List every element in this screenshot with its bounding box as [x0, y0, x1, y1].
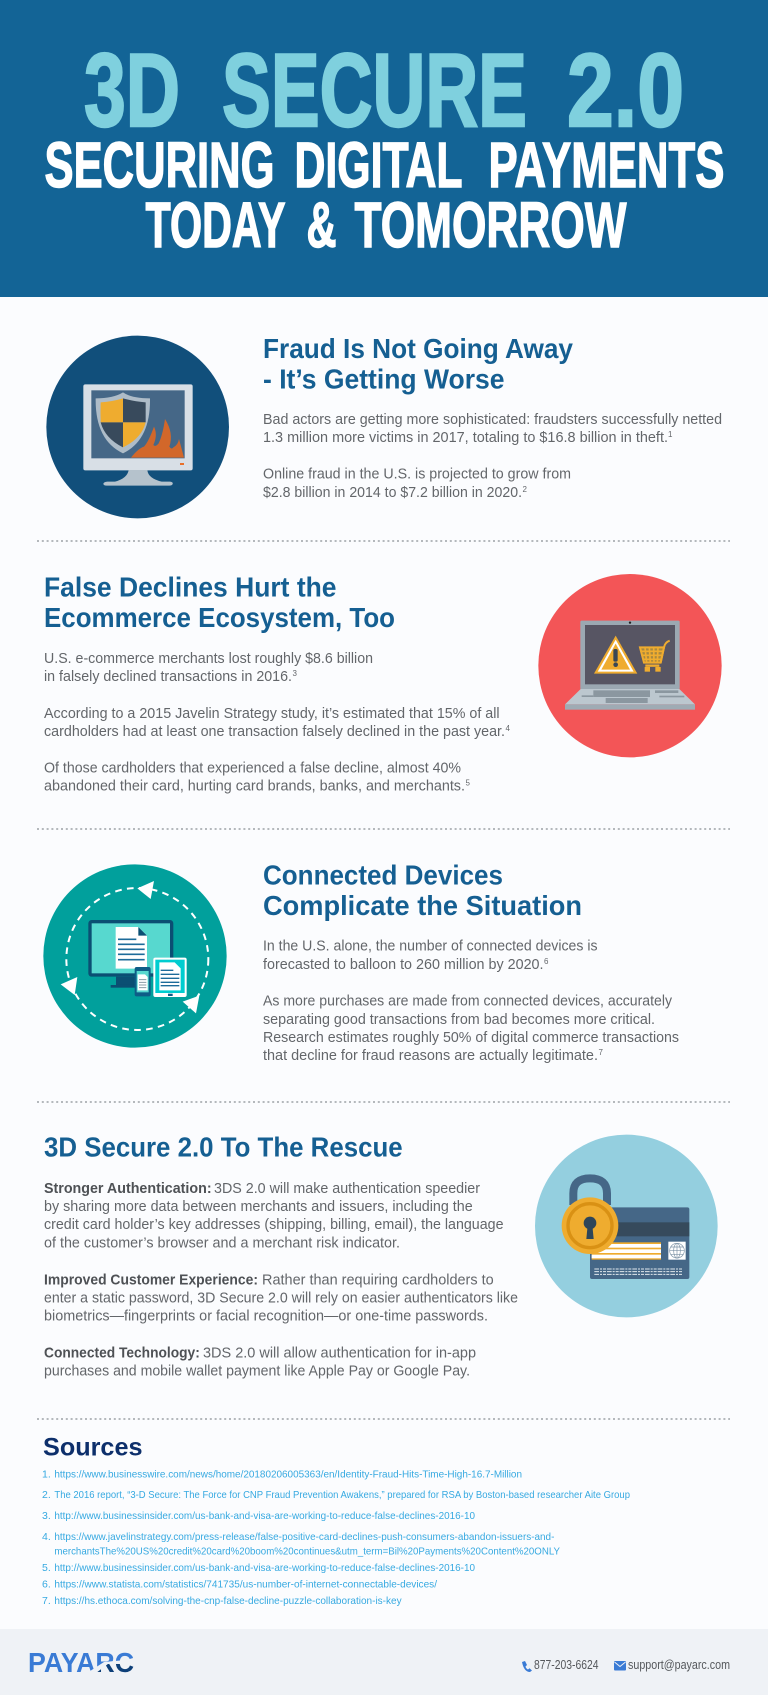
text block: improved customer experience: Improved Customer Experience: — [44, 1271, 258, 1288]
text block: stronger authentication: of the customer’s browser and a merchant risk indicator. — [44, 1234, 400, 1251]
text block: fraud body: 2 — [522, 485, 528, 494]
list: source links: https://www.javelinstrategy.com/press-release/false-positive-card-declines-push-consumers-abandon-issuers-and- — [54, 1531, 555, 1543]
text block: fraud body: Online fraud in the U.S. is projected to grow from — [263, 466, 571, 483]
list: source links: 6. — [42, 1579, 51, 1591]
text block: improved customer experience — [44, 1271, 518, 1325]
text block: connected devices body: As more purchases are made from connected devices, accurately — [263, 993, 672, 1010]
list: source links: 5. — [42, 1562, 51, 1574]
panel: false declines — [44, 571, 722, 795]
contact: phone: 877-203-6624 — [534, 1658, 599, 1672]
logo: PAYARC: PAYARC — [28, 1647, 134, 1678]
text block: false declines body: Of those cardholders that experienced a false decline, almost 40% — [44, 760, 461, 776]
footer — [0, 1629, 768, 1695]
icon: monitor with shield and flames — [46, 336, 229, 518]
text block: connected devices body — [263, 938, 679, 1064]
heading: connected devices: Complicate the Situation — [263, 890, 582, 921]
list: source links: https://www.businesswire.com/news/home/20180206005363/en/Identity-Fraud-Hits-Time-High-16.7-Million — [54, 1468, 522, 1480]
text block: connected devices body: that decline for fraud reasons are actually legitimate. — [263, 1047, 598, 1064]
list: source links: http://www.businessinsider.com/us-bank-and-visa-are-working-to-reduce-false-declines-2016-10 — [54, 1562, 475, 1574]
list: source links: https://www.statista.com/statistics/741735/us-number-of-internet-connectable-devices/ — [54, 1579, 437, 1591]
title: 3D Secure 2.0: 2.0 — [567, 33, 684, 149]
header banner — [0, 0, 768, 297]
list: source links: 3. — [42, 1510, 51, 1522]
icon: laptop with warning and cart — [538, 574, 722, 757]
subtitle: today and tomorrow — [146, 189, 627, 261]
icon: connected devices with arrows — [43, 864, 227, 1048]
title: 3D Secure 2.0: SECURE — [222, 33, 527, 149]
logo: PAYARC: PAYARC — [28, 1647, 134, 1678]
text block: stronger authentication: Stronger Authentication: — [44, 1180, 212, 1197]
text block: false declines body: abandoned their card, hurting card brands, banks, and merchants. — [44, 778, 465, 795]
subtitle: securing digital payments — [44, 129, 724, 201]
text block: connected devices body: 7 — [598, 1048, 604, 1057]
text block: false declines body: U.S. e-commerce merchants lost roughly $8.6 billion — [44, 650, 373, 667]
text block: connected devices body: Research estimates roughly 50% of digital commerce transactions — [263, 1029, 679, 1046]
heading: fraud — [263, 333, 573, 395]
logo: PAYARC — [30, 1652, 134, 1672]
list: source links: http://www.businessinsider.com/us-bank-and-visa-are-working-to-reduce-false-declines-2016-10 — [54, 1510, 475, 1522]
subtitle: today and tomorrow: & — [306, 189, 336, 261]
subtitle: today and tomorrow: TODAY — [146, 189, 286, 261]
list: source links: 7. — [42, 1595, 51, 1607]
text block: false declines body: 4 — [506, 724, 510, 733]
text block: connected devices body: In the U.S. alone, the number of connected devices is — [263, 938, 598, 955]
text block: connected devices body: separating good transactions from bad becomes more critical. — [263, 1011, 655, 1028]
contact: email: support@payarc.com — [628, 1658, 730, 1672]
text block: improved customer experience: enter a static password, 3D Secure 2.0 will rely on easier authenticators like — [44, 1290, 518, 1307]
text block: stronger authentication: by sharing more data between merchants and issuers, including the — [44, 1198, 473, 1215]
text block: connected technology: Connected Technology: — [44, 1344, 200, 1361]
heading: false declines: Ecommerce Ecosystem, Too — [44, 602, 395, 633]
list: source links: 1. — [42, 1468, 51, 1480]
text block: stronger authentication — [44, 1180, 504, 1251]
panel: fraud is not going away — [46, 333, 722, 518]
text block: connected technology: 3DS 2.0 will allow authentication for in-app — [203, 1344, 476, 1361]
text block: fraud body: 1 — [668, 430, 673, 439]
text block: fraud body: 1.3 million more victims in 2017, totaling to $16.8 billion in theft. — [263, 429, 668, 446]
list: source links: 4. — [42, 1531, 51, 1543]
text block: false declines body: According to a 2015 Javelin Strategy study, it’s estimated that 15% of all — [44, 705, 500, 722]
heading: sources: Sources — [43, 1434, 142, 1462]
text block: connected technology: purchases and mobile wallet payment like Apple Pay or Google Pay. — [44, 1362, 470, 1380]
text block: false declines body: 3 — [292, 669, 298, 678]
text block: false declines body: in falsely declined transactions in 2016. — [44, 668, 292, 685]
text block: false declines body: 5 — [466, 779, 470, 788]
text block: connected devices body: 6 — [544, 957, 549, 966]
heading: fraud: - It’s Getting Worse — [263, 364, 504, 395]
text block: stronger authentication: 3DS 2.0 will make authentication speedier — [214, 1180, 480, 1197]
text block: improved customer experience: biometrics—fingerprints or facial recognition—or one-time passwords. — [44, 1308, 488, 1325]
text block: false declines body — [44, 650, 510, 795]
list: source links: The 2016 report, “3-D Secure: The Force for CNP Fraud Prevention Awakens,” prepared for RSA by Boston-based researcher Aite Group — [54, 1489, 630, 1501]
heading: fraud: Fraud Is Not Going Away — [263, 333, 573, 364]
panel: connected devices — [43, 860, 679, 1064]
text block: connected technology — [44, 1344, 476, 1380]
text block: improved customer experience: Rather than requiring cardholders to — [262, 1271, 494, 1288]
text block: false declines body: cardholders had at least one transaction falsely declined in the past year. — [44, 723, 505, 740]
subtitle: securing digital payments: SECURING — [44, 129, 274, 201]
panel: 3D Secure to the rescue — [44, 1132, 718, 1380]
title: 3D Secure 2.0: 3D — [84, 33, 180, 149]
list: source links — [42, 1468, 630, 1607]
panel: sources — [42, 1434, 630, 1607]
subtitle: today and tomorrow: TOMORROW — [354, 189, 627, 261]
heading: connected devices — [263, 860, 582, 921]
subtitle: securing digital payments: DIGITAL — [294, 129, 462, 201]
heading: false declines — [44, 571, 395, 633]
list: source links: https://hs.ethoca.com/solving-the-cnp-false-decline-puzzle-collaboration-is-key — [54, 1595, 402, 1607]
heading: rescue: 3D Secure 2.0 To The Rescue — [44, 1132, 403, 1163]
text block: fraud body: Bad actors are getting more sophisticated: fraudsters successfully netted — [263, 411, 722, 428]
text block: fraud body — [263, 411, 722, 501]
text block: connected devices body: forecasted to balloon to 260 million by 2020. — [263, 956, 544, 973]
heading: connected devices: Connected Devices — [263, 860, 503, 891]
list: source links: 2. — [42, 1489, 51, 1501]
text block: fraud body: $2.8 billion in 2014 to $7.2 billion in 2020. — [263, 484, 522, 501]
icon: padlock and credit card — [535, 1135, 718, 1317]
heading: false declines: False Declines Hurt the — [44, 571, 336, 602]
list: source links: merchantsThe%20US%20credit%20card%20boom%20continues&utm_term=Bil%20Payments%20Content%20ONLY — [54, 1546, 560, 1558]
text block: stronger authentication: credit card holder’s key addresses (shipping, billing, email), the language — [44, 1216, 504, 1233]
